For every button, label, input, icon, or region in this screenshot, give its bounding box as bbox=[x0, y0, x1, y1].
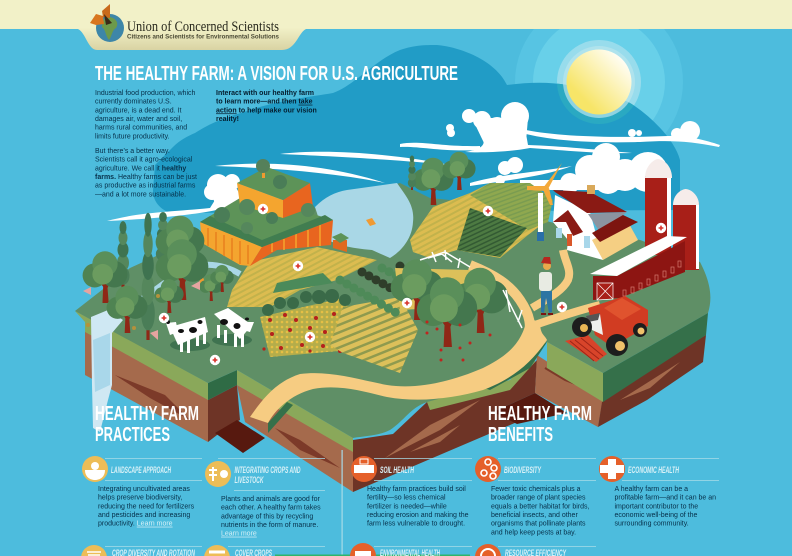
card: economic health: profitable farm—and it can be an bbox=[614, 495, 716, 502]
left grove of trees bbox=[83, 212, 234, 340]
card: biodiversity: organisms that pollinate plants bbox=[491, 521, 586, 528]
intro text column: But there’s a better way. bbox=[95, 148, 170, 155]
intro text column: agriculture. We call it healthy bbox=[95, 165, 186, 172]
card: integrating crops and livestock bbox=[205, 458, 325, 538]
card: integrating crops and livestock: Learn more bbox=[221, 531, 257, 538]
barn bbox=[590, 236, 687, 300]
dark shrub row bbox=[262, 289, 351, 316]
organisation name: Union of Concerned Scientists bbox=[127, 19, 279, 35]
intro text column: agriculture, is a dead end. It bbox=[95, 107, 181, 114]
icon: cover crops bbox=[204, 545, 230, 556]
heading: healthy farm practices bbox=[95, 403, 199, 446]
intro text column: farms. Healthy farms can be just bbox=[95, 174, 197, 181]
white clouds bbox=[107, 102, 720, 221]
alternating berry rows bbox=[340, 266, 422, 315]
card: economic health: important contributor to the bbox=[614, 503, 698, 510]
card: soil health: farm less vulnerable to drought. bbox=[367, 521, 465, 528]
intro text column bbox=[95, 90, 197, 198]
red-dotted flower field bbox=[260, 297, 350, 357]
card: biodiversity: beneficial insects, and other bbox=[491, 512, 578, 519]
card: economic health: ECONOMIC HEALTH bbox=[628, 465, 679, 475]
hillside fields bbox=[395, 183, 553, 310]
card: economic health: economic well-being of the bbox=[614, 512, 697, 519]
call to action text bbox=[216, 90, 317, 123]
globe icon bbox=[96, 14, 124, 42]
card: biodiversity: equals a better habitat for birds, bbox=[491, 503, 590, 510]
intro text column: harms rural communities, and bbox=[95, 125, 187, 132]
card: soil health bbox=[351, 456, 472, 528]
farmer bbox=[539, 257, 553, 315]
lake bbox=[315, 183, 413, 258]
card: integrating crops and livestock: nutrients in the form of manure. bbox=[221, 522, 318, 529]
call to action text: action to help make our vision bbox=[216, 107, 317, 114]
map hotspot markers bbox=[159, 204, 666, 365]
card: integrating crops and livestock: advantage of this by recycling bbox=[221, 513, 313, 520]
card: economic health: surrounding community. bbox=[614, 521, 689, 528]
intro text column: —and a lot more sustainable. bbox=[95, 191, 186, 198]
butterfly icon bbox=[90, 4, 112, 25]
card: landscape approach: and pesticides and increasing bbox=[98, 512, 190, 519]
icon: crops and livestock bbox=[205, 461, 231, 487]
icon: soil bbox=[351, 456, 377, 482]
bees and butterflies bbox=[83, 218, 376, 340]
card: economic health bbox=[599, 456, 719, 528]
wheat rows bbox=[273, 273, 333, 293]
call to action text: Interact with our healthy farm bbox=[216, 90, 314, 97]
dark blue cloud hills bbox=[153, 45, 680, 213]
icon: resource efficiency bbox=[475, 544, 501, 556]
main title: THE HEALTHY FARM: A VISION FOR U.S. AGRICULTURE bbox=[95, 63, 458, 85]
card: soil health: Healthy farm practices build soil bbox=[367, 486, 466, 493]
intro text column: damages air, water and soil, bbox=[95, 116, 182, 123]
farmhouse bbox=[553, 185, 638, 260]
icon: landscape bbox=[82, 456, 108, 482]
island soil block centre bbox=[237, 360, 567, 492]
card: soil health: SOIL HEALTH bbox=[380, 465, 414, 475]
card: landscape approach: productivity. Learn more bbox=[98, 521, 173, 528]
cows bbox=[166, 308, 254, 353]
card: integrating crops and livestock: LIVESTOCK bbox=[234, 475, 264, 485]
header banner bbox=[0, 0, 792, 50]
heading: healthy farm practices: HEALTHY FARM bbox=[95, 403, 199, 425]
intro text column: Scientists call it agro-ecological bbox=[95, 157, 193, 164]
icon: biodiversity bbox=[475, 456, 501, 482]
card: landscape approach: helps preserve biodiversity, bbox=[98, 495, 182, 502]
bottom row cards, cut off bbox=[81, 543, 596, 556]
mesa rock formation bbox=[197, 159, 349, 287]
intro text column: as productive as industrial farms bbox=[95, 183, 196, 190]
card: biodiversity bbox=[475, 456, 596, 536]
fences bbox=[420, 250, 522, 328]
tagline: Citizens and Scientists for Environmental Solutions bbox=[127, 34, 279, 40]
heading: healthy farm benefits: BENEFITS bbox=[488, 424, 553, 446]
card: integrating crops and livestock: each other. A healthy farm takes bbox=[221, 505, 321, 512]
icon: environmental health bbox=[350, 543, 376, 556]
call to action text: reality! bbox=[216, 116, 239, 123]
island soil block left bbox=[85, 325, 265, 453]
red combine harvester bbox=[565, 296, 648, 362]
card: soil health: fertilizer is needed—while bbox=[367, 503, 447, 510]
island soil block right bbox=[535, 335, 706, 427]
wind turbine bbox=[527, 163, 562, 241]
card: landscape approach: Integrating uncultivated areas bbox=[98, 486, 190, 493]
intro text column: Industrial food production, which bbox=[95, 90, 195, 97]
card: soil health: reducing erosion and making the bbox=[367, 512, 469, 519]
heading: healthy farm benefits bbox=[488, 403, 592, 446]
icon: economic health cross bbox=[599, 456, 625, 482]
card: economic health: A healthy farm can be a bbox=[614, 486, 688, 493]
card: landscape approach: reducing the need for fertilizers bbox=[98, 503, 195, 510]
intro text column: currently dominates U.S. bbox=[95, 99, 172, 106]
logo bbox=[90, 4, 279, 42]
dirt road bbox=[250, 250, 600, 433]
card: biodiversity: and help keep pests at bay. bbox=[491, 529, 576, 536]
intro text column: limits future productivity. bbox=[95, 133, 170, 140]
card: integrating crops and livestock: Plants and animals are good for bbox=[221, 496, 321, 503]
yellow terraced field bbox=[227, 247, 377, 307]
heading: healthy farm benefits: HEALTHY FARM bbox=[488, 403, 592, 425]
card: integrating crops and livestock: INTEGRATING CROPS AND bbox=[234, 465, 301, 475]
card: biodiversity: broader range of plant species bbox=[491, 495, 586, 502]
card: landscape approach bbox=[82, 456, 202, 528]
card: biodiversity: Fewer toxic chemicals plus a bbox=[491, 486, 581, 493]
heading: healthy farm practices: PRACTICES bbox=[95, 424, 170, 446]
sun with halos bbox=[153, 29, 683, 213]
island grass top bbox=[75, 183, 710, 452]
striped crop field bbox=[330, 297, 418, 373]
icon: crop diversity bbox=[81, 545, 107, 556]
silos bbox=[645, 159, 699, 270]
call to action text: to learn more—and then take bbox=[216, 99, 313, 106]
card: soil health: fertility—so less chemical bbox=[367, 495, 446, 502]
vertical divider and bottom strip bbox=[275, 450, 470, 556]
card: biodiversity: BIODIVERSITY bbox=[504, 465, 542, 475]
river and waterfall bbox=[91, 265, 240, 432]
card: landscape approach: LANDSCAPE APPROACH bbox=[111, 465, 171, 475]
orchard trees with apples bbox=[391, 152, 508, 362]
